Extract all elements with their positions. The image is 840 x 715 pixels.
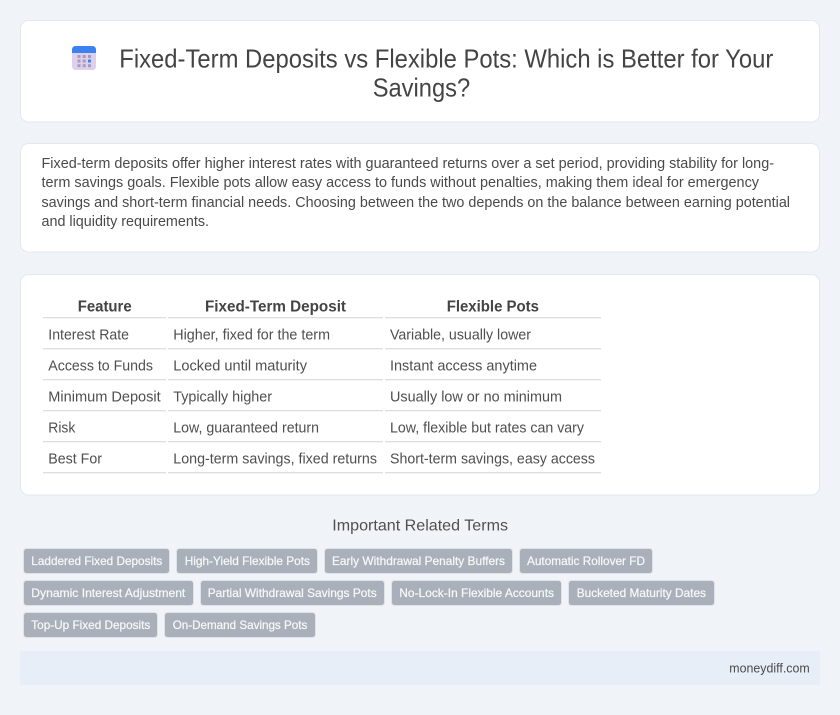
row: access to funds	[48, 358, 537, 374]
title	[119, 46, 774, 102]
row: access to funds: Locked until maturity	[173, 358, 308, 374]
panel: summary paragraph	[20, 144, 820, 252]
row: access to funds: Access to Funds	[48, 358, 153, 374]
row: risk: Risk	[48, 420, 76, 436]
tag: automatic rollover fd: Automatic Rollover FD	[527, 554, 645, 568]
row: best for: Long-term savings, fixed returns	[173, 451, 377, 467]
footer bar	[20, 651, 820, 685]
row: minimum deposit	[48, 389, 562, 405]
tag: laddered fixed deposits	[24, 548, 170, 574]
table header row	[78, 299, 539, 316]
row: minimum deposit: Usually low or no minimum	[390, 389, 562, 405]
tag: on-demand savings pots	[164, 612, 316, 638]
tag: dynamic interest adjustment	[24, 580, 194, 606]
table header row: Flexible Pots	[447, 299, 539, 316]
panel: comparison table	[20, 274, 820, 495]
footer source: moneydiff.com	[729, 660, 810, 675]
tag: on-demand savings pots: On-Demand Savings Pots	[173, 618, 307, 632]
title: Savings?	[373, 74, 470, 102]
row: risk	[48, 420, 585, 436]
row: best for: Best For	[48, 451, 102, 467]
row: minimum deposit: Typically higher	[173, 389, 272, 405]
panel: title header	[20, 20, 820, 122]
tag: no-lock-in flexible accounts: No-Lock-In Flexible Accounts	[399, 586, 554, 600]
row: best for	[48, 451, 595, 467]
row: risk: Low, flexible but rates can vary	[390, 420, 585, 436]
tag: early withdrawal penalty buffers: Early Withdrawal Penalty Buffers	[332, 554, 505, 568]
tag: dynamic interest adjustment: Dynamic Interest Adjustment	[31, 586, 186, 600]
table header row: Fixed-Term Deposit	[205, 299, 347, 316]
tag: bucketed maturity dates	[568, 580, 714, 606]
tag: partial withdrawal savings pots: Partial Withdrawal Savings Pots	[208, 586, 377, 600]
tag: no-lock-in flexible accounts	[392, 580, 562, 606]
text block: summary: Fixed-term deposits offer higher interest rates with guaranteed returns over a set period, providing stability for long-	[42, 156, 774, 172]
icon: calendar	[72, 46, 96, 70]
tag: high-yield flexible pots	[176, 548, 318, 574]
tag: automatic rollover fd	[520, 548, 652, 574]
tag: bucketed maturity dates: Bucketed Maturity Dates	[577, 586, 706, 600]
row: access to funds: Instant access anytime	[390, 358, 537, 374]
text block: summary: term savings goals. Flexible pots allow easy access to funds without penalties, making them ideal for emergency	[42, 175, 760, 191]
row: interest rate: Interest Rate	[48, 327, 129, 343]
row: interest rate	[48, 327, 531, 343]
tag: top-up fixed deposits	[24, 612, 158, 638]
row: interest rate: Higher, fixed for the term	[173, 327, 330, 343]
text block: summary	[42, 156, 790, 230]
tag: partial withdrawal savings pots	[200, 580, 384, 606]
row: best for: Short-term savings, easy access	[390, 451, 595, 467]
row: risk: Low, guaranteed return	[173, 420, 319, 436]
text block: summary: and liquidity requirements.	[42, 214, 209, 230]
row: minimum deposit: Minimum Deposit	[48, 389, 161, 405]
related term tags	[24, 548, 714, 638]
tag: laddered fixed deposits: Laddered Fixed Deposits	[31, 554, 162, 568]
text block: summary: savings and short-term financial needs. Choosing between the two depends on the balance between earning potential	[42, 195, 790, 211]
title: Fixed-Term Deposits vs Flexible Pots: Which is Better for Your	[119, 46, 774, 74]
row: interest rate: Variable, usually lower	[390, 327, 531, 343]
heading: important related terms: Important Related Terms	[332, 518, 508, 535]
tag: early withdrawal penalty buffers	[324, 548, 512, 574]
table header row: Feature	[78, 299, 132, 316]
tag: top-up fixed deposits: Top-Up Fixed Deposits	[31, 618, 150, 632]
table row lines	[43, 317, 601, 473]
tag: high-yield flexible pots: High-Yield Flexible Pots	[185, 554, 310, 568]
